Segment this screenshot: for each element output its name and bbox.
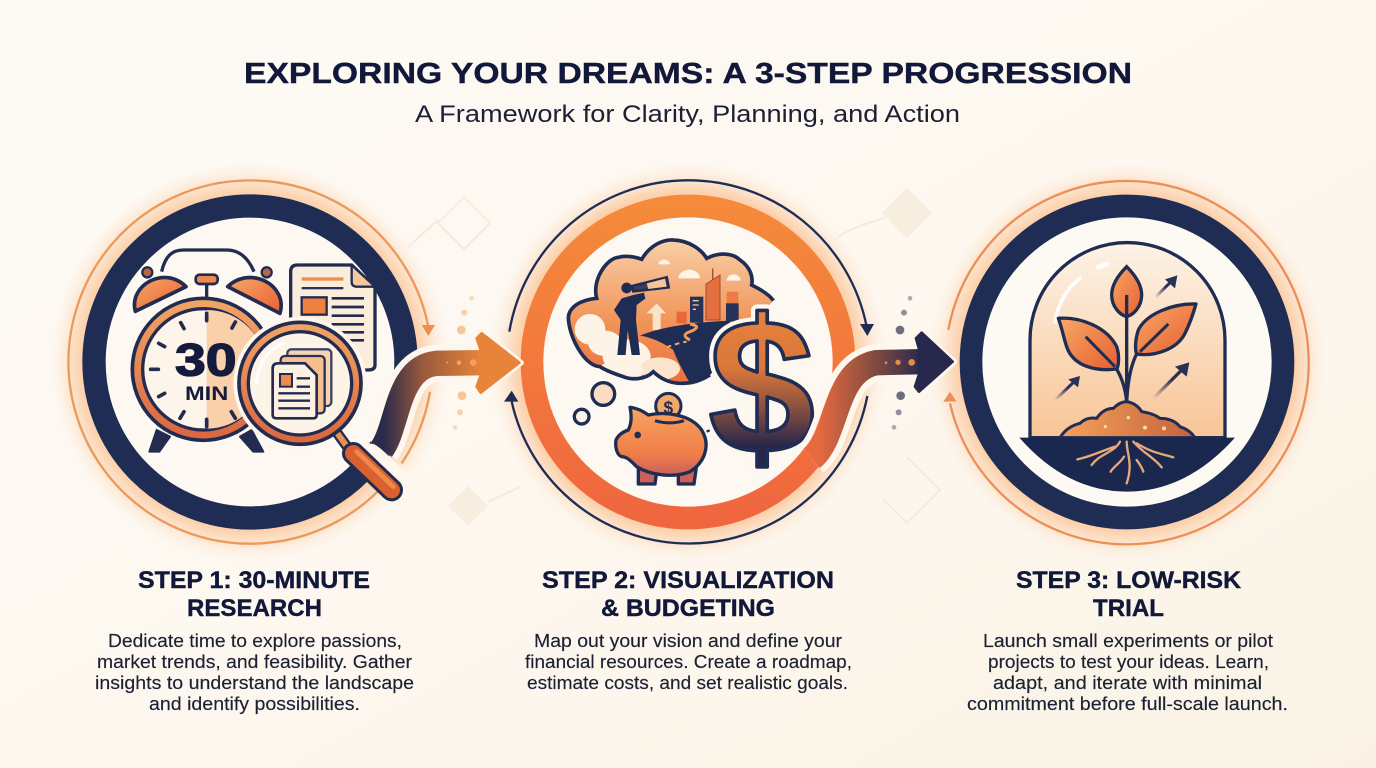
heading: step 2: STEP 2: VISUALIZATION: [542, 567, 834, 594]
panel: step 1 illustration: [50, 162, 450, 562]
icon: thought cloud with visionary: [568, 240, 773, 383]
panel: step 3 illustration: [927, 162, 1327, 562]
text block: step 3: [967, 567, 1288, 714]
icon: dollar sign: $: [708, 279, 815, 494]
description: step 3: adapt, and iterate with minimal: [993, 672, 1262, 693]
heading: step 1: RESEARCH: [187, 595, 322, 622]
icon: thought bubbles: [574, 383, 615, 424]
soil: [1060, 402, 1195, 438]
heading: step 3: TRIAL: [1093, 595, 1164, 622]
icon: piggy bank: $: [664, 397, 674, 417]
icon: document: [291, 265, 375, 370]
subtitle: A Framework for Clarity, Planning, and Action: [415, 101, 960, 128]
description: step 1: market trends, and feasibility. Gather: [97, 651, 412, 672]
description: step 2: Map out your vision and define your: [534, 630, 842, 651]
icon: alarm clock: [132, 250, 281, 452]
leaves: [1112, 267, 1142, 317]
icon: dollar sign: $: [708, 279, 815, 494]
glow: [50, 162, 450, 562]
description: step 1: Dedicate time to explore passions,: [108, 630, 402, 651]
icon: magnifying glass: [233, 317, 403, 492]
description: step 3: Launch small experiments or pilot: [983, 630, 1273, 651]
growth arrows: [1055, 279, 1185, 400]
heading: step 2: & BUDGETING: [601, 595, 775, 622]
navy ring: [971, 206, 1283, 518]
stem: [1117, 317, 1137, 402]
description: step 1: [95, 630, 414, 714]
icon: sprout in glass dome: [1019, 243, 1235, 492]
roots: [1077, 442, 1173, 483]
text block: step 2: [525, 567, 852, 693]
arrow: step 1 to step 2: [382, 296, 522, 449]
flow dots: [446, 359, 477, 366]
description: step 1: insights to understand the landscape: [95, 672, 414, 693]
outer orange loop arrow: [943, 181, 1309, 544]
icon: alarm clock: MIN: [185, 384, 228, 405]
heading: step 1: [138, 567, 370, 622]
heading: step 1: STEP 1: 30-MINUTE: [138, 567, 370, 594]
heading: step 3: [1016, 567, 1242, 622]
glow: [927, 162, 1327, 562]
description: step 3: projects to test your ideas. Learn,: [988, 651, 1269, 672]
description: step 3: commitment before full-scale launch.: [967, 693, 1288, 714]
icon: piggy bank: [616, 393, 720, 484]
arrow: step 2 to step 3: [812, 296, 955, 458]
title: EXPLORING YOUR DREAMS: A 3-STEP PROGRESSION: [244, 58, 1132, 90]
description: step 2: financial resources. Create a roadmap,: [525, 651, 852, 672]
heading: step 2: [542, 567, 834, 622]
heading: step 3: STEP 3: LOW-RISK: [1016, 567, 1242, 594]
clock label: 30: [175, 335, 237, 386]
description: step 3: [967, 630, 1288, 714]
description: step 1: and identify possibilities.: [149, 693, 360, 714]
panel: step 2 illustration: [488, 162, 888, 562]
decorative diamonds: [407, 188, 940, 526]
orange ring: [532, 206, 844, 518]
description: step 2: [525, 630, 852, 693]
navy ring: [94, 206, 406, 518]
navy loop arrows: [504, 180, 874, 543]
glow: [488, 162, 888, 562]
text block: step 1: [95, 567, 414, 714]
description: step 2: estimate costs, and set realistic goals.: [527, 672, 848, 693]
figure with telescope: [614, 277, 669, 355]
flow dots: [885, 359, 915, 366]
outer orange loop arrow: [68, 180, 435, 544]
